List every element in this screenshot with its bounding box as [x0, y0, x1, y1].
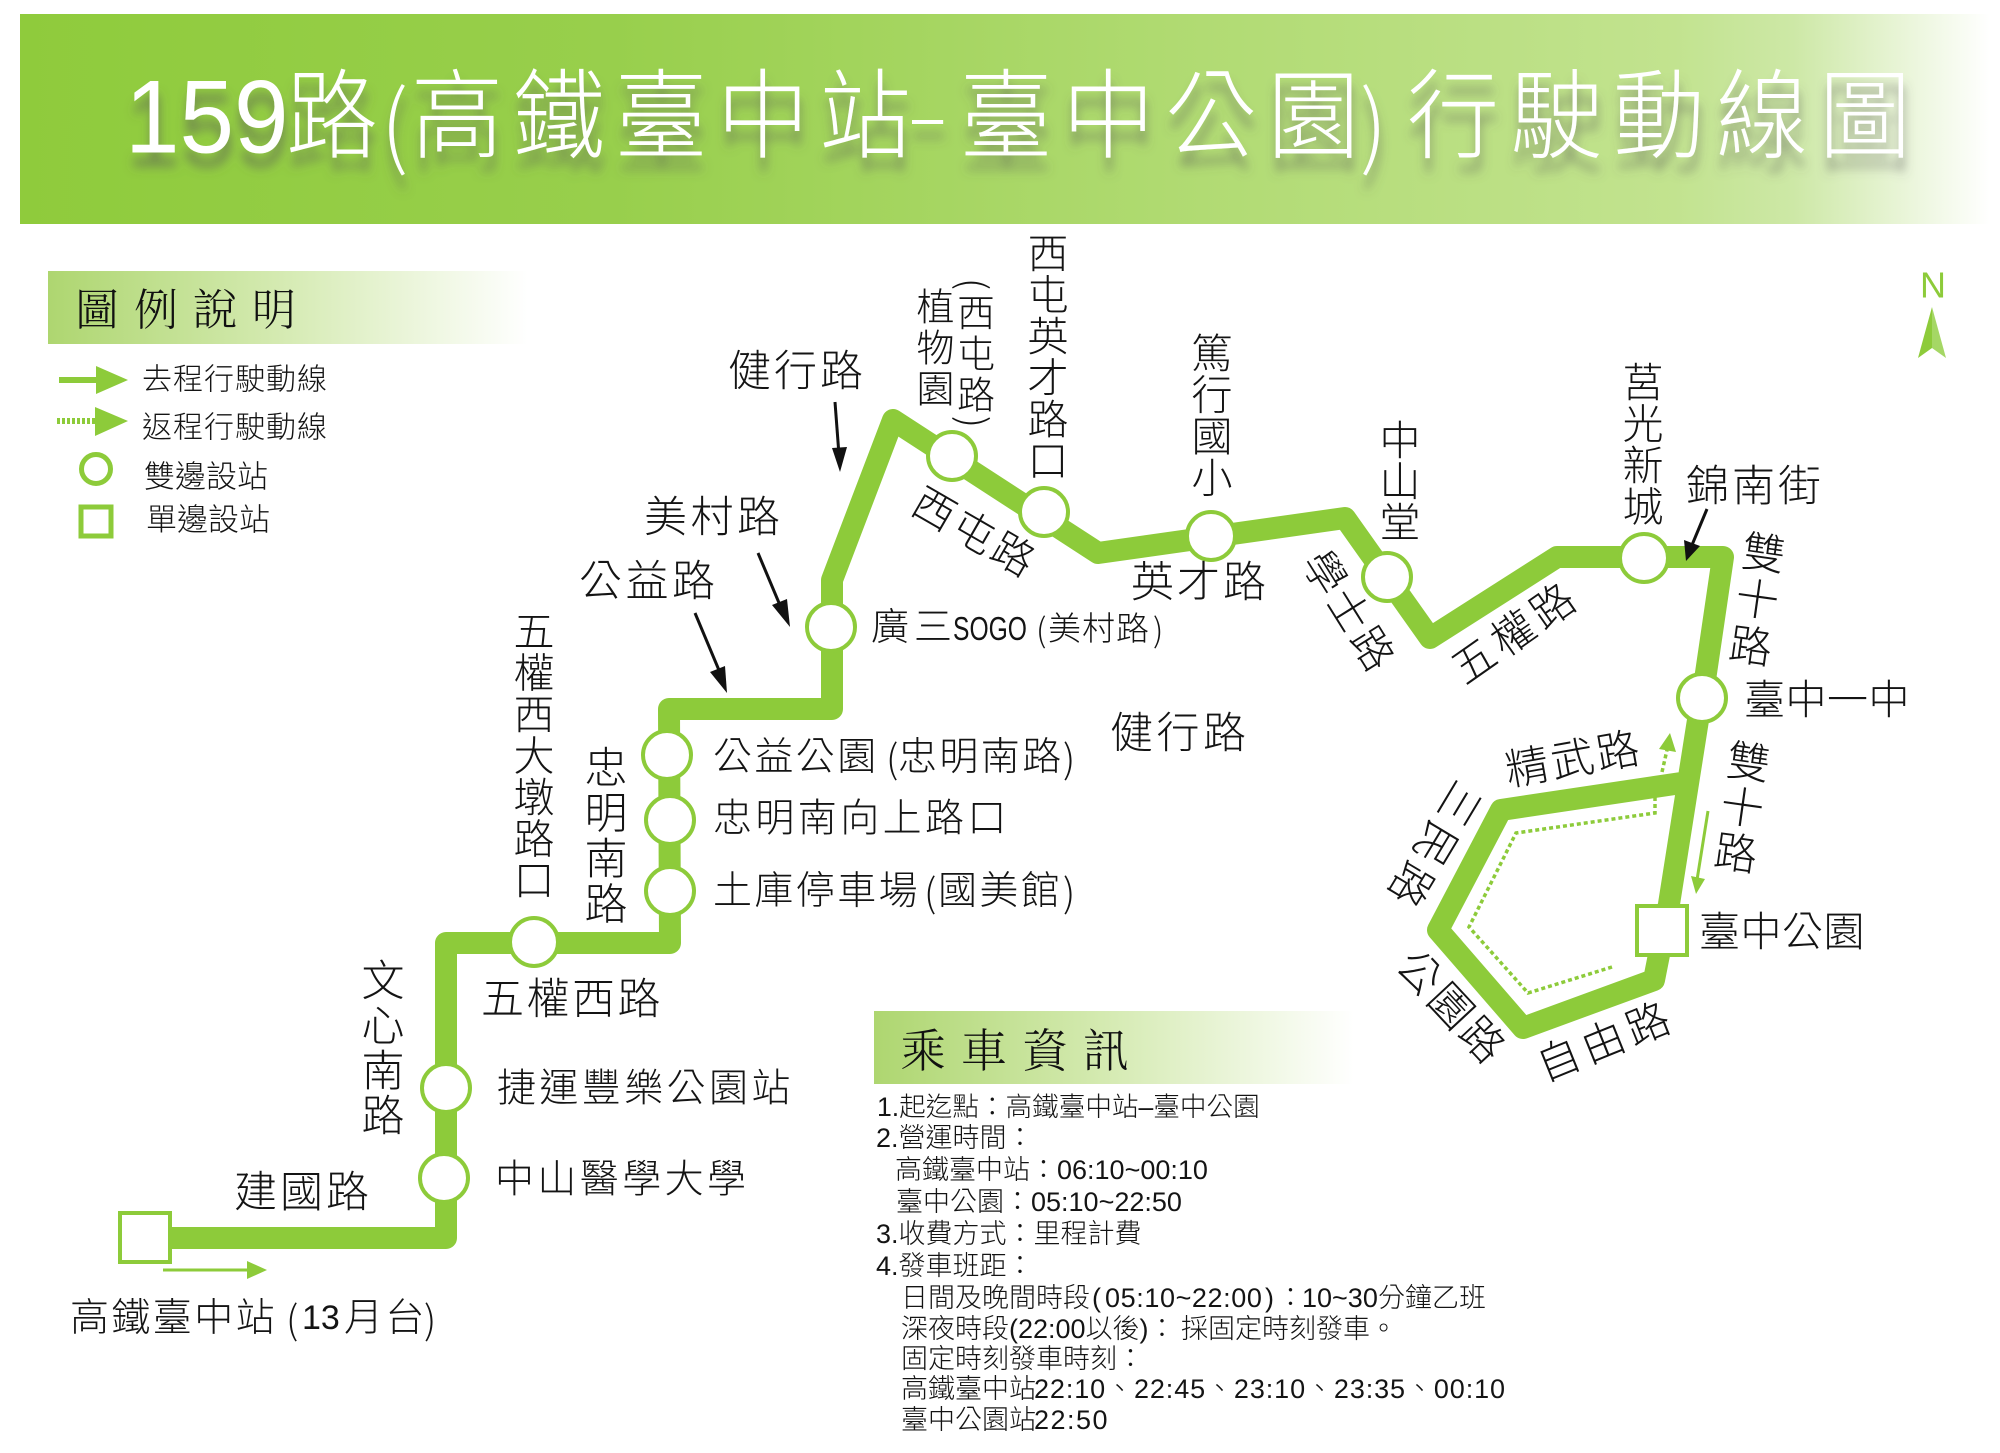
label: 公益路: 公益路: [579, 558, 718, 606]
label: 公益公園(忠明南路): 忠明南路: [898, 736, 1064, 778]
label: 臺中公園: 臺中公園: [1699, 909, 1865, 955]
legend: one-way stop: [81, 502, 270, 538]
label: 五權路: 五權路: [1443, 572, 1589, 694]
legend: return route: 返程行駛動線: [142, 412, 328, 444]
title: (: [381, 51, 408, 184]
label: 忠明南向上路口: 忠明南向上路口: [713, 798, 1010, 840]
ride info panel: [874, 1011, 1506, 1435]
north arrow: [1918, 264, 1946, 358]
ride info text: 採固定時刻發車。: [1181, 1314, 1397, 1344]
arrow: Meicun Rd: [758, 553, 790, 627]
label: 公益公園(忠明南路): 公益公園: [713, 736, 879, 778]
label: 廣三SOGO(美村路): 廣三: [871, 607, 957, 649]
ride info text: 高鐵臺中站：06:10~00:10: [895, 1155, 1208, 1185]
label: 廣三SOGO(美村路): 美村路: [1048, 610, 1150, 646]
label: 文心南路: 文心南路: [355, 958, 404, 1138]
ride info text: ：: [1277, 1283, 1304, 1313]
title: 159: [125, 60, 288, 175]
ride info text: 4.發車班距：: [876, 1251, 1034, 1281]
label: 錦南街: 錦南街: [1686, 463, 1824, 511]
title: 行駛動線圖: [1407, 63, 1922, 172]
ride info text: 3.收費方式：里程計費: [876, 1219, 1142, 1249]
label: 雙十路 upper: 十: [1732, 574, 1782, 628]
road label arrows: [695, 402, 1707, 693]
label: 土庫停車場(國美館): (: [924, 863, 936, 919]
label: 篤行國小: 篤行國小: [1185, 332, 1232, 498]
stop: Gongyi Park: [643, 731, 691, 779]
label: 土庫停車場(國美館): 土庫停車場: [713, 870, 920, 912]
label: 美村路: 美村路: [644, 494, 784, 542]
title: –: [912, 85, 944, 151]
north arrow: N: [1920, 264, 1946, 306]
stop: Wuquan W. Dadun: [510, 918, 558, 966]
ride info text: (: [1092, 1283, 1101, 1313]
ride info text: 分鐘乙班: [1378, 1283, 1486, 1313]
label: 廣三SOGO(美村路): (: [1036, 604, 1046, 652]
label: 公益公園(忠明南路): (: [886, 729, 898, 785]
label: 中山醫學大學: 中山醫學大學: [495, 1158, 749, 1202]
ride info text: ): [1265, 1283, 1274, 1313]
label: 土庫停車場(國美館): ): [1063, 863, 1075, 919]
label: 捷運豐樂公園站: 捷運豐樂公園站: [497, 1068, 794, 1110]
stops: [120, 432, 1726, 1262]
legend: return route: [57, 407, 328, 444]
stop: SOGO: [807, 603, 855, 651]
ride info text: 10~30: [1302, 1283, 1378, 1313]
ride info heading: [874, 1011, 1354, 1084]
ride info text: 日間及晚間時段: [901, 1283, 1090, 1313]
direction arrow at start: [163, 1261, 267, 1279]
stop: Zhongming S. Xiangshang: [646, 796, 694, 844]
label: 西屯英才路口: 西屯英才路口: [1021, 232, 1068, 481]
ride info text: 05:10~22:00: [1105, 1283, 1262, 1313]
label: 五權西大墩路口: 五權西大墩路口: [507, 610, 554, 900]
title: ): [1360, 51, 1387, 184]
title: 臺中公園: [960, 63, 1370, 172]
label: 公益公園(忠明南路): ): [1063, 729, 1075, 785]
label: 植物園: 植物園: [910, 287, 953, 410]
label: 雙十路 lower: 十: [1717, 782, 1767, 836]
label: 廣三SOGO(美村路): SOGO: [953, 610, 1027, 646]
label: 高鐵臺中站(13月台): 月台: [344, 1296, 427, 1340]
arrow: Jianxing Rd: [832, 402, 847, 472]
arrow: Jinnan St: [1684, 509, 1707, 561]
direction arrow on Shuangshi Road: [1691, 811, 1708, 894]
legend: one-way stop: 單邊設站: [146, 502, 270, 538]
stop: Chung Shan Medical: [420, 1154, 468, 1202]
stop: Juguang New City: [1620, 534, 1668, 582]
return route arrowhead: [1659, 733, 1676, 752]
label: 高鐵臺中站(13月台): (: [286, 1290, 298, 1346]
label: 學士路: 學士路: [1293, 542, 1405, 682]
stop: Tuku parking: [646, 867, 694, 915]
legend heading: [48, 271, 528, 344]
ride info text: 高鐵臺中站: [901, 1374, 1036, 1404]
label: 臺中一中: 臺中一中: [1744, 677, 1910, 723]
arrow: Gongyi Rd: [695, 613, 727, 693]
ride info text: 深夜時段(22:00以後)：: [901, 1314, 1176, 1344]
label: 三民路: 三民路: [1376, 772, 1490, 918]
ride info text: 22:50: [1034, 1405, 1109, 1435]
stop: Dusing Elementary: [1187, 512, 1235, 560]
label: 健行路 top: 健行路: [728, 348, 866, 396]
legend heading: 圖例說明: [75, 274, 311, 338]
stop: Zhongshan Hall: [1363, 553, 1411, 601]
ride info text: 臺中公園站: [901, 1405, 1036, 1435]
label: 高鐵臺中站(13月台): ): [424, 1290, 436, 1346]
stop: Taichung Park: [1637, 906, 1687, 955]
label: 中山堂: 中山堂: [1373, 419, 1419, 542]
title banner: [20, 14, 1990, 224]
label: 公園路: 公園路: [1386, 941, 1516, 1075]
ride info text: [876, 1092, 1506, 1435]
return route dotted line: [1469, 750, 1667, 993]
label: 英才路: 英才路: [1131, 559, 1269, 607]
ride info heading: 乘車資訊: [900, 1015, 1144, 1081]
stop: Botanical garden: [928, 432, 976, 480]
ride info text: 2.營運時間：: [876, 1123, 1034, 1153]
label: 高鐵臺中站(13月台): 高鐵臺中站: [70, 1296, 277, 1340]
label: 自由路: 自由路: [1530, 993, 1682, 1091]
ride info text: 1.起迄點：高鐵臺中站–臺中公園: [877, 1092, 1260, 1122]
label: 雙十路 upper: 路: [1726, 621, 1775, 674]
label: 廣三SOGO(美村路): ): [1153, 604, 1163, 652]
stop: Taichung First High: [1678, 674, 1726, 722]
label: 雙十路 upper: 雙: [1739, 528, 1788, 581]
label: (西屯路): (西屯路): [948, 278, 1004, 431]
label: 西屯路: 西屯路: [904, 479, 1046, 587]
legend: two-way stop: 雙邊設站: [144, 460, 268, 494]
label: 忠明南路: 忠明南路: [578, 745, 626, 927]
ride info text: 固定時刻發車時刻：: [901, 1344, 1144, 1374]
title: 高鐵臺中站: [411, 63, 921, 172]
ride info text: 22:10、22:45、23:10、23:35、00:10: [1034, 1374, 1506, 1404]
label: 五權西路: 五權西路: [481, 976, 663, 1024]
title: 路: [286, 63, 378, 172]
legend: outbound route: 去程行駛動線: [142, 364, 328, 396]
stop: HSR Taichung: [120, 1213, 170, 1262]
label: 精武路: 精武路: [1502, 724, 1646, 796]
label: 建國路: 建國路: [234, 1169, 372, 1217]
label: 雙十路 lower: 路: [1711, 828, 1760, 881]
stop: Xitun Yingcai: [1020, 488, 1068, 536]
route labels: [70, 232, 1910, 1346]
label: 健行路 middle: 健行路: [1110, 710, 1250, 758]
bus route main line: [150, 420, 1723, 1238]
label: 土庫停車場(國美館): 國美館: [938, 870, 1062, 912]
legend panel: [48, 271, 528, 538]
stop: MRT Fengle Park: [422, 1064, 470, 1112]
ride info text: 臺中公園：05:10~22:50: [896, 1187, 1182, 1217]
label: 莒光新城: 莒光新城: [1616, 361, 1662, 527]
legend: outbound route: [59, 364, 328, 396]
legend: two-way stop: [82, 454, 268, 494]
label: 雙十路 lower: 雙: [1724, 737, 1773, 790]
label: 高鐵臺中站(13月台): 13: [302, 1299, 340, 1337]
